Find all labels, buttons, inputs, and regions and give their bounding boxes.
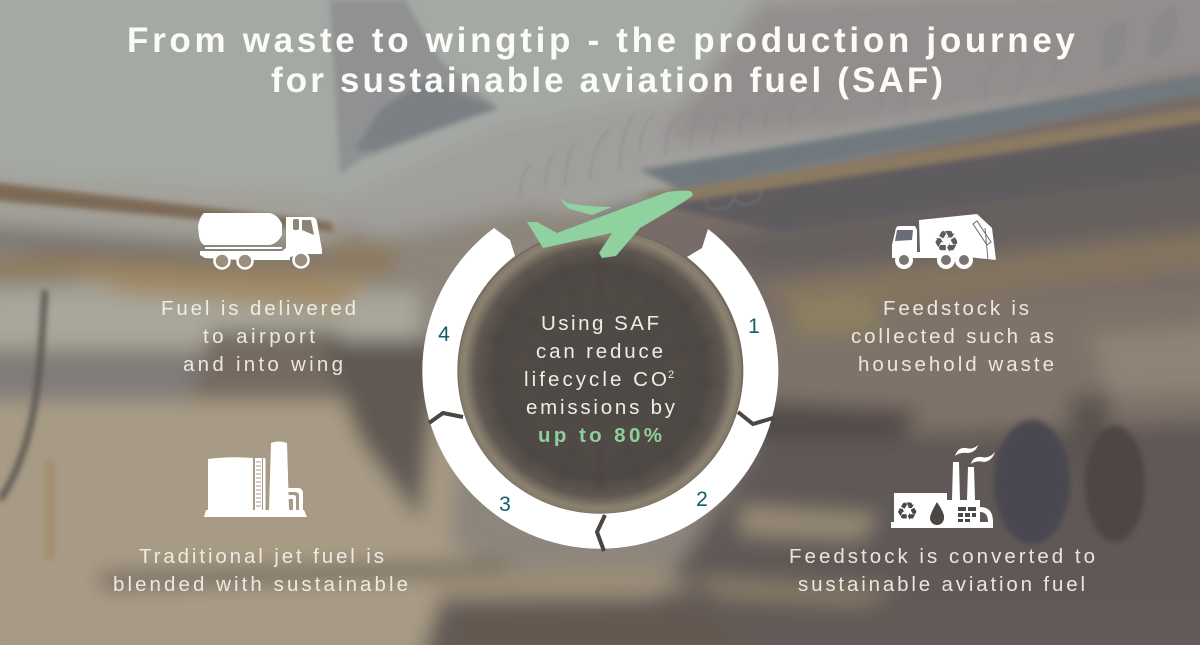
divider: segment 3 to 4 [429,413,463,423]
text: step 2: Feedstock is converted to [789,545,1095,568]
central message: emissions by [526,396,676,419]
icon: refinery factory: ♻ [896,497,918,526]
number 3: 3 [499,493,511,516]
number 1: 1 [748,315,760,338]
text: step 1: household waste [858,353,1054,376]
text: step 4: to airport [203,325,315,348]
text: step 4 [161,297,356,376]
title [127,21,1076,100]
icon: garbage truck: ♻ [933,225,960,260]
central message: Using SAF [541,312,659,335]
engine circle with fan [457,229,743,515]
central message: 2 [668,369,674,381]
text: step 1 [851,297,1054,376]
central message [524,312,676,447]
ring: four process segments [422,228,778,551]
number 2: 2 [696,488,708,511]
text: step 3: blended with sustainable [113,573,408,596]
central message: can reduce [536,340,663,363]
text: step 2: sustainable aviation fuel [798,573,1085,596]
title: for sustainable aviation fuel (SAF) [271,61,943,100]
text: step 1: collected such as [851,325,1054,348]
icon: garbage truck [892,214,996,267]
icon: fuel tanker truck [198,213,322,268]
central message: lifecycle CO [524,368,667,391]
divider: segment 2 to 3 [597,515,605,551]
icon: refinery factory [891,445,995,528]
icon: fuel storage tank and chimney [204,442,307,517]
title: From waste to wingtip - the production journey [127,21,1076,60]
text: step 1: Feedstock is [883,297,1029,320]
icon: green plane [527,191,693,258]
number 4: 4 [438,323,450,346]
text: step 4: and into wing [183,353,343,376]
text: step 3: Traditional jet fuel is [139,545,384,568]
text: step 3 [113,545,408,596]
divider: segment 1 to 2 [738,412,773,424]
text: step 2 [789,545,1095,596]
central message: up to 80% [538,424,662,447]
text: step 4: Fuel is delivered [161,297,356,320]
